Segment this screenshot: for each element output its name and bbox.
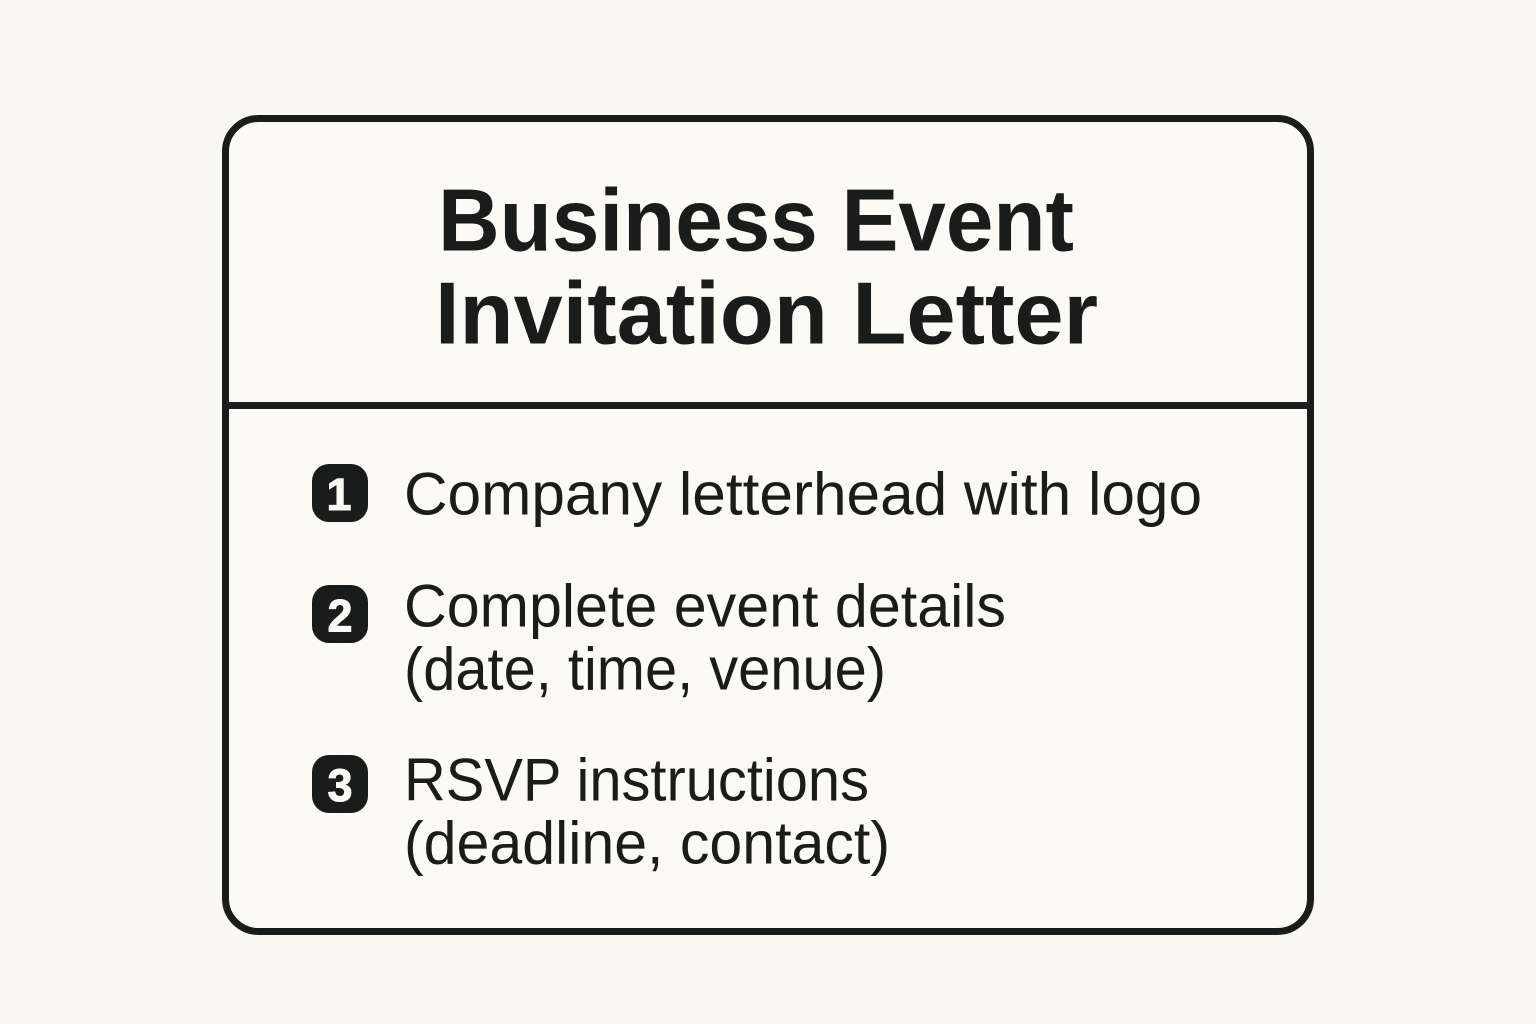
item 2: event details: Complete event details: [404, 572, 1006, 640]
item 2: event details: 2: [327, 590, 353, 642]
panel: invitation letter card: [226, 118, 1310, 932]
item 3: RSVP instructions: (deadline, contact): [404, 810, 890, 876]
item 2: event details: [312, 572, 1006, 702]
item 1: letterhead: 1: [326, 469, 352, 520]
item 3: RSVP instructions: 3: [327, 760, 353, 811]
heading: [435, 170, 1098, 362]
item 3: RSVP instructions: [312, 746, 890, 876]
heading: Business Event: [438, 170, 1074, 270]
heading: Invitation Letter: [435, 264, 1098, 362]
item 1: letterhead: Company letterhead with logo: [404, 460, 1202, 528]
item 2: event details: (date, time, venue): [404, 636, 886, 702]
item 3: RSVP instructions: RSVP instructions: [404, 746, 869, 814]
